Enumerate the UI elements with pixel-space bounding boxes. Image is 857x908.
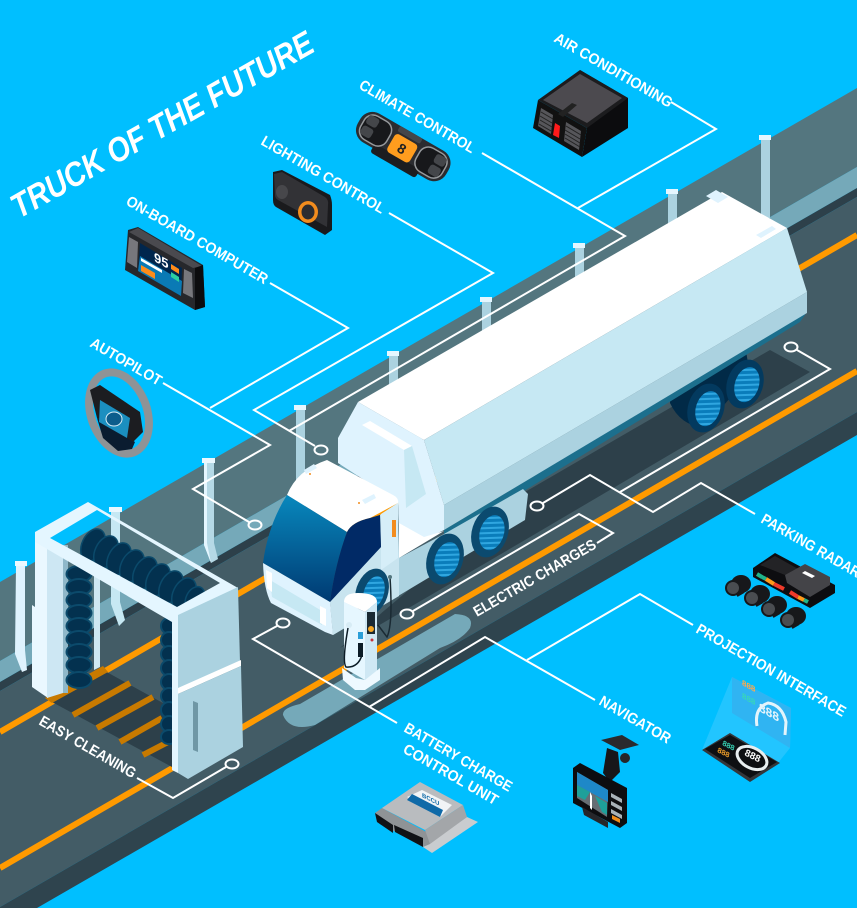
right pillar — [172, 587, 243, 779]
truck shadow — [340, 350, 810, 648]
icon: projection interface — [702, 677, 791, 782]
rear wheels — [670, 345, 770, 437]
line: easy cleaning — [137, 767, 226, 798]
icon: projection interface: 888 — [759, 700, 779, 725]
leader lines — [137, 102, 830, 798]
line: autopilot — [163, 383, 270, 522]
roof lights — [304, 464, 376, 504]
line: electric charges — [413, 514, 613, 611]
icon: projection interface: 888 — [721, 739, 736, 753]
terminals — [226, 342, 798, 768]
label: autopilot: AUTOPILOT — [87, 335, 165, 389]
label: electric charges: ELECTRIC CHARGES — [470, 536, 599, 620]
gantry frame — [35, 502, 238, 622]
line: climate control — [289, 153, 625, 431]
line: parking radar — [543, 475, 755, 514]
icon: lighting control switch — [273, 170, 332, 235]
label: on-board computer: ON-BOARD COMPUTER — [123, 193, 271, 288]
line: projection interface — [527, 594, 693, 660]
icon: climate control panel: 8 — [395, 140, 409, 158]
lower orange road line — [0, 371, 857, 868]
label: easy cleaning: EASY CLEANING — [36, 713, 139, 782]
fence posts — [15, 135, 771, 672]
line: battery — [253, 626, 397, 723]
icon: projection interface: 888 — [742, 678, 756, 694]
truck — [263, 190, 807, 635]
windshield — [263, 495, 347, 602]
trailer — [338, 190, 807, 540]
left pillar — [32, 530, 100, 698]
line: navigator — [369, 637, 595, 707]
charger shadow — [283, 614, 471, 727]
side window — [330, 515, 381, 602]
icon: projection interface: 888 — [716, 746, 731, 760]
line: lighting control — [254, 213, 493, 446]
label: air conditioning: AIR CONDITIONING — [551, 30, 676, 111]
line: on-board computer — [210, 283, 348, 408]
label: navigator: NAVIGATOR — [596, 693, 674, 748]
line: parking radar to tail — [620, 350, 830, 492]
title: TRUCK OF THE FUTURE — [4, 24, 322, 226]
icon: steering wheel — [73, 359, 165, 467]
icon: navigator dash camera — [573, 735, 639, 828]
chassis and cab side — [330, 489, 528, 635]
label: battery charge control unit: BATTERY CHARGE — [401, 720, 515, 795]
icon: on-board computer: 95 — [154, 249, 169, 272]
icon: projection interface: 888 — [743, 748, 762, 765]
icon: air conditioning unit — [533, 70, 628, 157]
trailer roof — [358, 192, 787, 440]
charging station — [342, 575, 392, 690]
car wash — [32, 502, 243, 779]
sensors — [725, 575, 806, 629]
bumper — [263, 563, 333, 635]
right vertical roller — [161, 618, 177, 744]
icon: climate control panel — [348, 107, 456, 191]
icon: projection interface: 888 — [742, 691, 756, 707]
cab roof — [287, 460, 398, 532]
icon: battery charge control unit — [375, 782, 478, 853]
label: battery charge control unit: CONTROL UNIT — [400, 741, 501, 809]
icon: on-board computer — [125, 227, 205, 310]
line: air conditioning — [578, 102, 716, 208]
left vertical roller — [66, 566, 92, 688]
label: lighting control: LIGHTING CONTROL — [258, 133, 388, 217]
top roller — [76, 525, 209, 615]
wash floor shadow with stripes — [45, 666, 172, 767]
cab front wheels — [349, 502, 515, 620]
icon: battery charge control unit: BCCU — [422, 792, 440, 808]
icon: parking radar — [725, 553, 835, 629]
label: climate control: CLIMATE CONTROL — [356, 77, 478, 157]
